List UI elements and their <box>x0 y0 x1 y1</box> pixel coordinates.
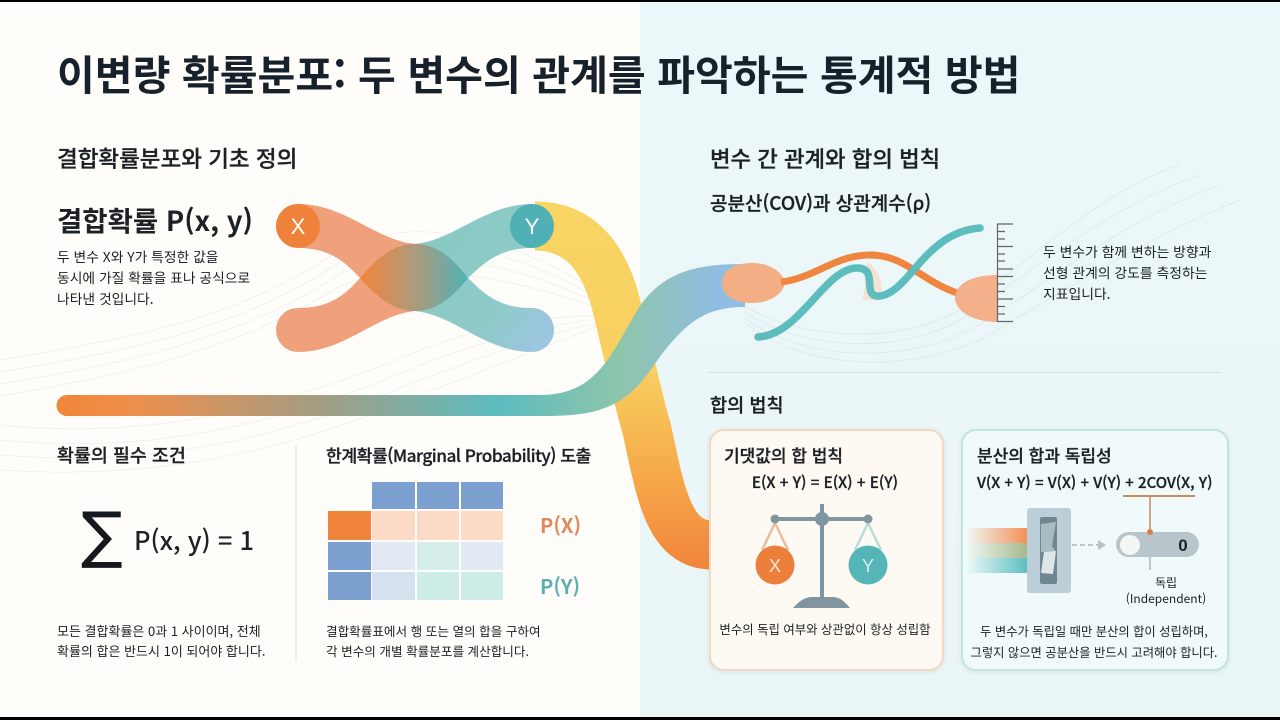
node Y: Y <box>525 214 540 239</box>
label P(X): P(X) <box>540 510 581 539</box>
icon: balance scale: Y <box>862 556 874 576</box>
yellow to orange flow band <box>535 226 712 545</box>
text: joint probability description: 두 변수 X와 Y가 특정한 값을 <box>57 246 218 266</box>
section dividers <box>708 372 1222 374</box>
formula: E(X + Y) = E(X) + E(Y) <box>752 471 898 493</box>
text: condition description: 확률의 합은 반드시 1이 되어야 합니다. <box>57 641 265 660</box>
teal Y band <box>415 204 554 352</box>
label P(Y): P(Y) <box>540 571 580 600</box>
heading: joint probability: 결합확률 P(x, y) <box>57 199 253 239</box>
text: marginal description: 각 변수의 개별 확률분포를 계산합니다. <box>326 641 529 660</box>
faint wave lines <box>0 232 610 472</box>
card note: 그렇지 않으면 공분산을 반드시 고려해야 합니다. <box>971 643 1217 661</box>
heading: law of sums: 합의 법칙 <box>710 391 784 418</box>
covariance illustration <box>722 224 1013 337</box>
node X <box>276 204 320 248</box>
ruler <box>997 224 1013 322</box>
diagram: switch and toggle <box>968 495 1199 593</box>
text: covariance description: 선형 관계의 강도를 측정하는 <box>1043 262 1207 282</box>
text: joint probability description <box>57 246 250 308</box>
marginal probability table <box>328 482 503 600</box>
formula: V(X + Y) = V(X) + V(Y) + 2COV(X, Y) <box>977 472 1212 493</box>
card heading: 분산의 합과 독립성 <box>977 442 1112 467</box>
text: joint probability description: 동시에 가질 확률을 표나 공식으로 <box>57 267 250 287</box>
text: marginal description <box>326 621 541 660</box>
label: independent: 독립 <box>1155 574 1177 591</box>
heading: joint distribution: 결합확률분포와 기초 정의 <box>57 142 297 174</box>
title: 이변량 확률분포: 두 변수의 관계를 파악하는 통계적 방법 <box>57 42 1020 102</box>
orange X band <box>276 204 415 352</box>
icon: balance scale: X <box>769 556 781 576</box>
heading: required condition: 확률의 필수 조건 <box>57 442 186 468</box>
text: joint probability description: 나타낸 것입니다. <box>57 288 154 308</box>
card note <box>971 622 1217 661</box>
label: independent <box>1126 574 1206 607</box>
text: covariance description <box>1043 241 1211 303</box>
lens overlap <box>360 244 468 311</box>
panel: expected value <box>709 429 944 671</box>
bottom letterbox bar <box>0 717 1280 720</box>
panel: variance <box>961 429 1229 671</box>
heading: marginal probability: 한계확률(Marginal Probability) 도출 <box>326 442 591 467</box>
heading: variable relationships: 변수 간 관계와 합의 법칙 <box>710 142 940 174</box>
formula: sum of probabilities <box>81 498 254 571</box>
text: covariance description: 지표입니다. <box>1043 283 1111 303</box>
text: condition description: 모든 결합확률은 0과 1 사이이며, 전체 <box>57 621 261 640</box>
card heading: 기댓값의 합 법칙 <box>724 442 843 467</box>
text: marginal description: 결합확률표에서 행 또는 열의 합을 구하여 <box>326 621 541 640</box>
text: condition description <box>57 621 265 660</box>
icon: balance scale <box>756 504 888 608</box>
top letterbox bar <box>0 0 1280 2</box>
node X: X <box>291 214 306 239</box>
node Y <box>510 204 554 248</box>
label: independent: (Independent) <box>1126 590 1206 607</box>
long gradient band <box>56 264 745 416</box>
text: covariance description: 두 변수가 함께 변하는 방향과 <box>1043 241 1211 261</box>
heading: covariance: 공분산(COV)과 상관계수(ρ) <box>710 189 931 216</box>
card note: 두 변수가 독립일 때만 분산의 합이 성립하며, <box>980 622 1208 640</box>
formula: sum of probabilities: P(x, y) = 1 <box>134 521 254 558</box>
formula: sum of probabilities: ∑ <box>81 498 123 571</box>
diagram: switch and toggle: 0 <box>1178 536 1188 555</box>
card note: 변수의 독립 여부와 상관없이 항상 성립함 <box>719 620 931 638</box>
